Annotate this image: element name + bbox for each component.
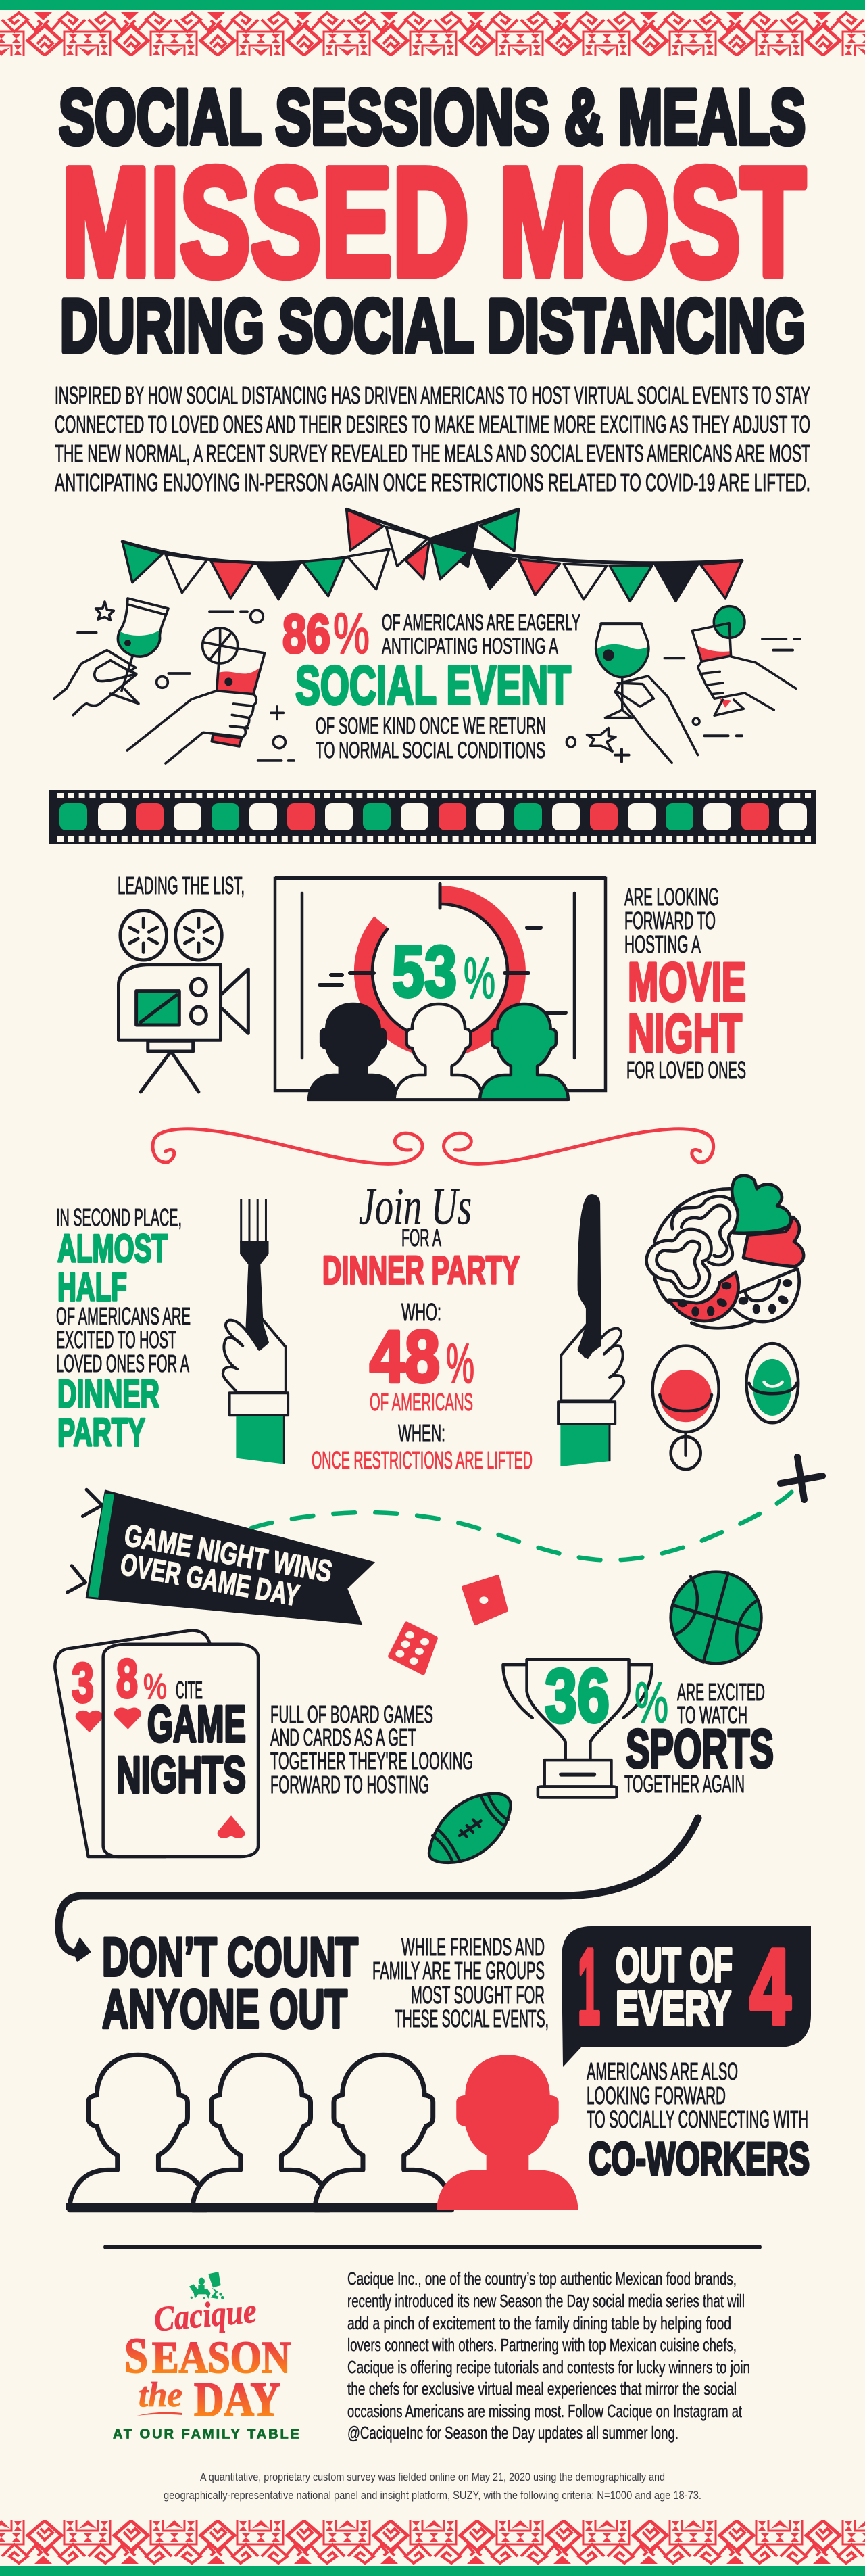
screen frame xyxy=(275,878,606,1091)
illustration: row of four people xyxy=(66,2055,578,2210)
panel: movie night xyxy=(118,872,746,1100)
text: almost half: PARTY xyxy=(57,1410,145,1455)
text: about Cacique: @CaciqueInc for Season the Day updates all summer long. xyxy=(347,2423,678,2443)
icon: playing cards: % xyxy=(143,1667,167,1707)
text: co-workers: LOOKING FORWARD xyxy=(587,2082,726,2109)
text: friends and family: THESE SOCIAL EVENTS, xyxy=(395,2005,549,2032)
text: almost half xyxy=(56,1203,191,1455)
heading: don't count anyone out: DON’T COUNT xyxy=(102,1927,358,1988)
text: almost half: ALMOST xyxy=(57,1226,168,1271)
logo: Cacique Season the Day: the xyxy=(139,2376,182,2414)
text: 86% of Americans: TO NORMAL SOCIAL CONDITIONS xyxy=(316,738,545,763)
arrow: connecting arrow xyxy=(59,1818,698,1962)
text: invitation xyxy=(312,1176,533,1474)
icon: playing cards: 3 xyxy=(72,1651,94,1714)
text: movie night: NIGHT xyxy=(628,1003,742,1064)
text: invitation: Join Us xyxy=(359,1176,472,1235)
text: 86% of Americans: ANTICIPATING HOSTING A xyxy=(382,634,558,659)
text: movie night: MOVIE xyxy=(628,952,746,1013)
text: friends and family: WHILE FRIENDS AND xyxy=(401,1933,545,1961)
text: movie night: ARE LOOKING xyxy=(624,883,719,911)
text: survey source xyxy=(164,2471,701,2502)
text: friends and family: FAMILY ARE THE GROUPS xyxy=(372,1957,545,1984)
text: survey source: A quantitative, proprietary custom survey was fielded online on May 21, 2020 using the demographically and xyxy=(200,2471,665,2483)
icon: green glass xyxy=(746,1343,798,1423)
heading: don't count anyone out xyxy=(102,1927,358,2040)
text: survey source: geographically-representative national panel and insight platform, SUZY, with the following criteria: N=1000 and age 18-73. xyxy=(164,2489,701,2502)
text: movie night: FORWARD TO xyxy=(624,907,716,934)
logo: Cacique Season the Day: Cacique xyxy=(152,2292,258,2339)
logo: Cacique Season the Day: AT OUR FAMILY TABLE xyxy=(113,2427,299,2442)
bunting xyxy=(122,509,742,601)
text: invitation: DINNER PARTY xyxy=(322,1248,520,1293)
text: 36% sports xyxy=(545,1654,774,1798)
callout: 1 out of every 4: 1 xyxy=(578,1928,600,2047)
text: 86% of Americans xyxy=(282,602,580,763)
text: invitation: 48 xyxy=(370,1316,440,1398)
icon: red die one xyxy=(464,1577,506,1623)
icon: red wine glass xyxy=(653,1346,719,1469)
text: almost half: HALF xyxy=(57,1266,127,1309)
icon: red die six xyxy=(390,1623,436,1673)
text: invitation: ONCE RESTRICTIONS ARE LIFTED xyxy=(312,1446,533,1474)
text: invitation: OF AMERICANS xyxy=(370,1388,473,1416)
icon: film camera xyxy=(119,911,248,1092)
chart: 53% ring xyxy=(320,884,566,1048)
text: almost half: OF AMERICANS ARE xyxy=(56,1302,191,1330)
text: invitation: FOR A xyxy=(401,1224,441,1251)
logo: Cacique Season the Day: EASON xyxy=(152,2333,291,2383)
pennant xyxy=(68,1489,375,1625)
panel: coworkers xyxy=(66,1926,811,2210)
text: 36% sports: SPORTS xyxy=(626,1719,774,1780)
pennant: OVER GAME DAY xyxy=(118,1547,302,1613)
text: board games: FORWARD TO HOSTING xyxy=(270,1771,429,1798)
callout: 1 out of every 4: OUT OF xyxy=(616,1939,733,1993)
text: 86% of Americans: OF AMERICANS ARE EAGERLY xyxy=(382,610,580,636)
text: leading the list: LEADING THE LIST, xyxy=(118,872,245,899)
text: 36% sports: % xyxy=(635,1671,668,1734)
text: co-workers xyxy=(587,2057,810,2185)
intro paragraph xyxy=(55,381,810,496)
text: almost half: DINNER xyxy=(57,1373,159,1416)
illustration: hands toasting on the right xyxy=(566,606,800,763)
icon: football xyxy=(429,1794,511,1863)
pennant: GAME NIGHT WINS xyxy=(122,1518,335,1589)
icon: playing cards xyxy=(55,1631,258,1857)
text: about Cacique xyxy=(347,2268,750,2443)
text: board games: TOGETHER THEY'RE LOOKING xyxy=(270,1747,473,1775)
text: invitation: WHEN: xyxy=(398,1419,445,1447)
illustration: hands toasting on the left xyxy=(54,598,294,763)
text: 36% sports: TOGETHER AGAIN xyxy=(624,1770,745,1798)
text: invitation: WHO: xyxy=(401,1298,441,1326)
icon: playing cards: GAME xyxy=(147,1696,246,1753)
icon: basketball xyxy=(671,1572,761,1663)
dashed line xyxy=(251,1492,791,1560)
title xyxy=(59,74,806,368)
icon: plus mark xyxy=(781,1457,822,1500)
film strip xyxy=(49,790,816,844)
text: almost half: IN SECOND PLACE, xyxy=(56,1203,182,1231)
icon: hand holding knife xyxy=(558,1194,624,1466)
icon: playing cards: NIGHTS xyxy=(116,1746,246,1804)
icon: plate of food xyxy=(647,1176,804,1328)
text: board games xyxy=(270,1700,473,1798)
text: movie night xyxy=(624,883,746,1084)
decorative flourish xyxy=(153,1129,714,1164)
text: almost half: EXCITED TO HOST xyxy=(56,1326,176,1354)
callout: 1 out of every 4: EVERY xyxy=(616,1982,731,2036)
callout: 1 out of every 4: 4 xyxy=(750,1928,791,2047)
number: 53%: % xyxy=(464,947,495,1011)
top border: green bar and red pattern xyxy=(0,0,865,56)
text: 86% of Americans: OF SOME KIND ONCE WE RETURN xyxy=(316,713,546,739)
icon: trophy xyxy=(503,1659,652,1798)
text: about Cacique: the chefs for exclusive virtual meal experiences that mirror the social xyxy=(347,2379,737,2399)
text: 86% of Americans: % xyxy=(333,602,370,666)
text: movie night: HOSTING A xyxy=(624,930,701,958)
callout: 1 out of every 4 xyxy=(562,1926,811,2067)
icon: playing cards: 8 xyxy=(116,1648,138,1709)
text: almost half: LOVED ONES FOR A xyxy=(56,1350,189,1377)
text: movie night: FOR LOVED ONES xyxy=(626,1056,746,1084)
icon: green horsemen xyxy=(189,2272,224,2299)
logo: Cacique Season the Day: DAY xyxy=(194,2372,280,2427)
bottom border: red pattern and green bar xyxy=(0,2520,865,2576)
icon: playing cards: CITE xyxy=(176,1676,203,1704)
text: board games: AND CARDS AS A GET xyxy=(270,1723,416,1751)
panel: game night xyxy=(55,1457,822,1863)
number: 53%: 53 xyxy=(392,930,457,1011)
text: 86% of Americans: 86 xyxy=(282,604,330,665)
text: invitation: % xyxy=(446,1332,474,1395)
heading: don't count anyone out: ANYONE OUT xyxy=(102,1979,347,2040)
panel: social event xyxy=(54,509,800,763)
text: friends and family: MOST SOUGHT FOR xyxy=(411,1981,545,2009)
text: 36% sports: TO WATCH xyxy=(677,1701,747,1729)
text: co-workers: AMERICANS ARE ALSO xyxy=(587,2057,738,2085)
illustration: three viewers xyxy=(307,1004,568,1100)
panel: dinner party xyxy=(56,1176,804,1474)
logo: Cacique Season the Day xyxy=(113,2272,299,2442)
text: 86% of Americans: SOCIAL EVENT xyxy=(295,655,571,716)
text: about Cacique: add a pinch of excitement to the family dining table by helping food xyxy=(347,2313,731,2333)
text: 36% sports: ARE EXCITED xyxy=(677,1678,765,1706)
divider xyxy=(103,2245,762,2249)
logo: Cacique Season the Day: S xyxy=(124,2329,148,2384)
text: board games: FULL OF BOARD GAMES xyxy=(270,1700,433,1728)
text: friends and family xyxy=(372,1933,549,2032)
icon: hand holding fork xyxy=(223,1199,288,1464)
text: 36% sports: 36 xyxy=(545,1654,610,1738)
